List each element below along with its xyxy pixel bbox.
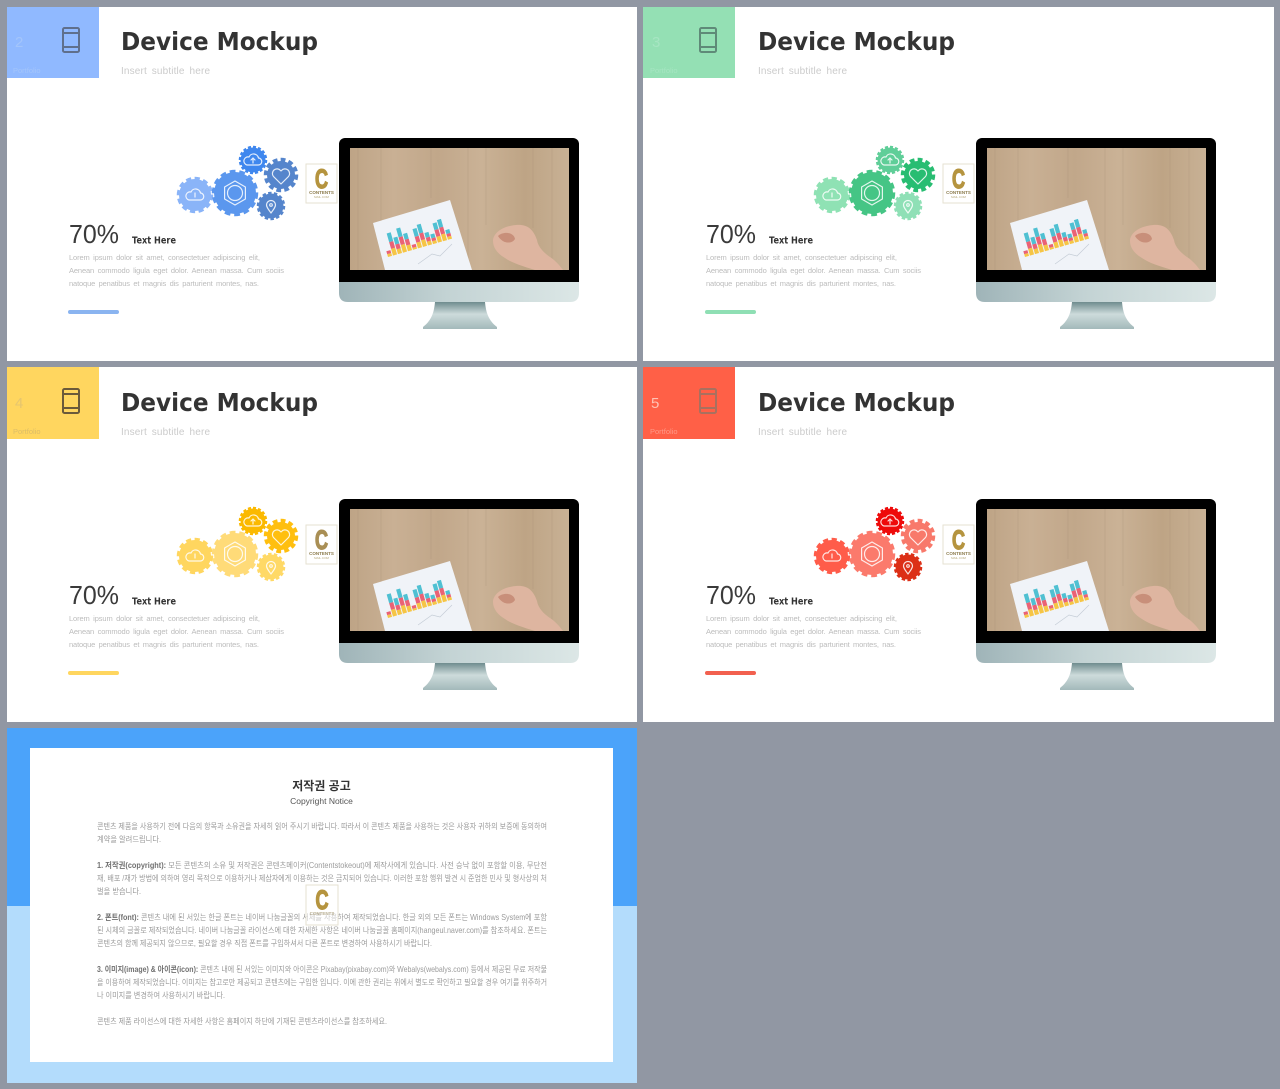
text label: Text Here — [132, 236, 176, 246]
notice heading: 저작권 공고 — [292, 778, 351, 793]
section tab: green: Portfolio — [650, 66, 678, 75]
notice body text: 벌을 받습니다. — [97, 886, 141, 896]
logo: C — [315, 164, 328, 194]
statistic: 70% — [706, 580, 756, 610]
body text — [706, 253, 921, 288]
logo: C — [952, 164, 965, 194]
section tab: red — [643, 367, 735, 439]
section tab: blue — [7, 7, 99, 78]
title: Device Mockup — [121, 388, 318, 417]
device: monitor — [339, 138, 579, 329]
gears cluster — [816, 508, 932, 580]
section tab: red: 5 — [651, 395, 659, 412]
accent bar — [68, 671, 119, 675]
panel: green device mockup — [643, 7, 1274, 361]
panel: copyright notice — [7, 728, 637, 1083]
accent bar — [705, 671, 756, 675]
body text: natoque penatibus et magnis dis parturient montes, nas. — [69, 640, 259, 649]
body text — [706, 614, 921, 649]
section tab: yellow: 4 — [15, 395, 23, 412]
notice body text: 재, 배포 /재가 방법에 의하여 영리 목적으로 이용하거나 제삼자에게 이용하는 것은 금지되어 있습니다. 이러한 포함 행위 발견 시 준엄한 민사 및 형사상의 처 — [97, 873, 547, 883]
section tab: yellow — [7, 367, 99, 439]
section tab: red: Portfolio — [650, 427, 678, 436]
body text: natoque penatibus et magnis dis parturient montes, nas. — [706, 279, 896, 288]
subtitle: Insert subtitle here — [121, 66, 210, 77]
logo: CONTENTS — [946, 551, 971, 556]
body text: natoque penatibus et magnis dis parturient montes, nas. — [69, 279, 259, 288]
logo — [943, 525, 974, 564]
logo: CONTENTS — [309, 551, 334, 556]
notice body text: 나 이미지를 변경하여 사용하시기 바랍니다. — [97, 990, 225, 1000]
notice body text: 1. 저작권(copyright): 모든 콘텐츠의 소유 및 저작권은 콘텐츠메이커(Contentstokeout)에 제작사에게 있습니다. 사전 승낙 없이 포함할 이용, 무단전 — [97, 860, 547, 870]
accent bar — [705, 310, 756, 314]
body text: Aenean commodo ligula eget dolor. Aenean massa. Cum sociis — [706, 627, 921, 636]
subtitle: Insert subtitle here — [758, 427, 847, 438]
body text: Aenean commodo ligula eget dolor. Aenean massa. Cum sociis — [706, 266, 921, 275]
text label: Text Here — [132, 596, 176, 608]
panel: blue device mockup — [7, 7, 637, 361]
section tab: green — [643, 7, 735, 78]
section tab: green: 3 — [652, 34, 660, 51]
logo: C — [952, 525, 965, 555]
body text: Lorem ipsum dolor sit amet, consectetuer adipiscing elit, — [69, 614, 260, 623]
section tab: blue: Portfolio — [13, 66, 41, 75]
logo: MAIL.COM — [951, 195, 966, 199]
icon: tablet — [63, 28, 79, 52]
device: monitor — [976, 499, 1216, 690]
logo: MAIL.COM — [314, 556, 329, 560]
panel: red device mockup — [643, 367, 1274, 722]
notice body text: 계약을 알려드립니다. — [97, 834, 161, 844]
logo watermark: CONTENTS — [310, 911, 334, 916]
logo: MAIL.COM — [314, 195, 329, 199]
icon: tablet — [63, 389, 79, 413]
title: Device Mockup — [758, 388, 955, 417]
body text: Aenean commodo ligula eget dolor. Aenean massa. Cum sociis — [69, 266, 284, 275]
body text: Lorem ipsum dolor sit amet, consectetuer adipiscing elit, — [69, 253, 260, 262]
subtitle: Insert subtitle here — [758, 66, 847, 77]
title: Device Mockup — [758, 27, 955, 56]
icon: tablet — [700, 28, 716, 52]
text label: Text Here — [769, 236, 813, 246]
notice body text: 2. 폰트(font): 콘텐츠 내에 된 서있는 한글 폰트는 네이버 나눔글꼴의 서체를 사용하여 제작되었습니다. 한글 외의 모든 폰트는 Windows System에 포함 — [97, 912, 547, 922]
notice body text: 을 이용하여 제작되었습니다. 이미지는 참고로만 제공되고 콘텐츠에는 구입한 입니다. 이에 관한 권리는 위에서 별도로 확인하고 필요할 경우 여기를 위주하거 — [97, 977, 547, 987]
body text: natoque penatibus et magnis dis parturient montes, nas. — [706, 640, 896, 649]
body text: Lorem ipsum dolor sit amet, consectetuer adipiscing elit, — [706, 614, 897, 623]
logo — [306, 525, 337, 564]
statistic: 70% — [69, 219, 119, 249]
gears cluster — [816, 147, 932, 218]
icon: tablet — [700, 389, 716, 413]
accent bar — [68, 310, 119, 314]
notice body text: 3. 이미지(image) & 아이콘(icon): 콘텐츠 내에 된 서있는 이미지와 아이콘은 Pixabay(pixabay.com)와 Webalys(webalys.com) 등에서 제공된 무료 저작물 — [97, 964, 547, 974]
logo watermark: C — [316, 885, 328, 915]
body text: Aenean commodo ligula eget dolor. Aenean massa. Cum sociis — [69, 627, 284, 636]
notice body text: 된 시체의 글꼴로 제작되었습니다. 네이버 나눔글꼴 라이선스에 대한 자세한 사항은 네이버 나눔글꼴 홈페이지(hangeul.naver.com)를 참조하세요. 폰트는 — [97, 925, 547, 935]
subtitle: Insert subtitle here — [121, 427, 210, 438]
notice body text: 콘텐츠의 함께 제공되지 않으므로, 필요할 경우 직접 폰트를 구입하셔서 다른 폰트로 변경하여 사용하시기 바랍니다. — [97, 938, 432, 948]
notice subheading: Copyright Notice — [290, 796, 353, 806]
logo — [306, 164, 337, 203]
logo: CONTENTS — [309, 190, 334, 195]
title: Device Mockup — [121, 27, 318, 56]
logo — [943, 164, 974, 203]
section tab: yellow: Portfolio — [13, 427, 41, 436]
panel: yellow device mockup — [7, 367, 637, 722]
text label: Text Here — [769, 596, 813, 608]
section tab: blue: 2 — [15, 34, 23, 51]
notice body text: 콘텐츠 제품 라이선스에 대한 자세한 사항은 홈페이지 하단에 기재된 콘텐츠라이선스를 참조하세요. — [97, 1016, 387, 1026]
notice body text — [97, 821, 547, 1026]
logo: C — [315, 525, 328, 555]
gears cluster — [179, 147, 296, 218]
body text: Lorem ipsum dolor sit amet, consectetuer adipiscing elit, — [706, 253, 897, 262]
logo watermark — [306, 885, 338, 925]
logo: MAIL.COM — [951, 556, 966, 560]
device: monitor — [976, 138, 1216, 329]
notice body text: 콘텐츠 제품을 사용하기 전에 다음의 항목과 소유권을 자세히 읽어 주시기 바랍니다. 따라서 이 콘텐츠 제품을 사용하는 것은 사용자 귀하의 보증에 동의하여 — [97, 821, 547, 831]
gears cluster — [179, 508, 296, 580]
logo: CONTENTS — [946, 190, 971, 195]
body text — [69, 253, 284, 288]
statistic: 70% — [69, 580, 119, 610]
device: monitor — [339, 499, 579, 690]
statistic: 70% — [706, 219, 756, 249]
body text — [69, 614, 284, 649]
